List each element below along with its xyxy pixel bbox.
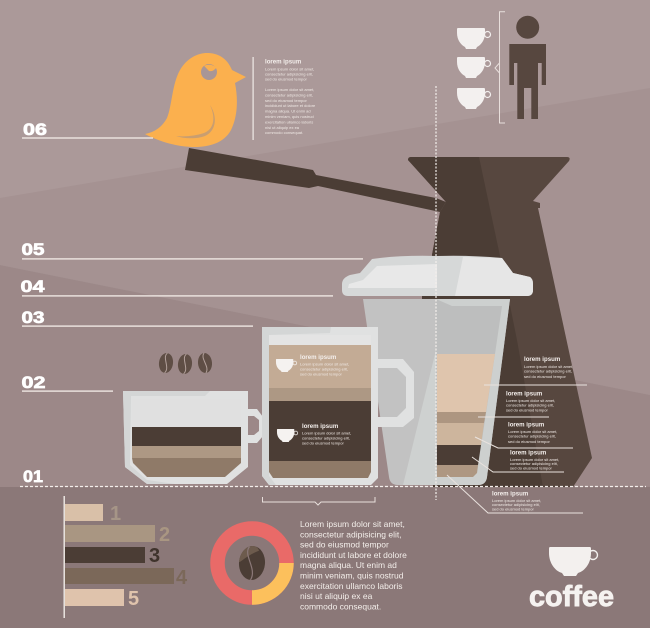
logo cup: [549, 547, 591, 576]
donut chart: [218, 528, 286, 598]
callout 5: consectetur adipisicing elit,: [492, 502, 540, 507]
level labels: 02: [22, 373, 46, 392]
callout 4: [472, 450, 564, 472]
pot shadow side: [408, 157, 543, 487]
mug text lower: [277, 423, 351, 446]
cup lid: [342, 256, 533, 299]
callout 4: sed do eiusmod tempor: [510, 466, 552, 470]
mug text lower: lorem ipsum: [302, 423, 339, 430]
bird wing: [176, 105, 215, 138]
callout 3: sed do eiusmod tempor: [508, 439, 550, 444]
tall mug shell: [262, 327, 378, 485]
bird caption: sed do eiusmod tempor: [265, 76, 307, 82]
coffee pot: [185, 148, 592, 487]
paragraph: incididunt ut labore et dolore: [300, 550, 407, 560]
under mug brace: [262, 497, 375, 505]
callout 3: consectetur adipisicing elit,: [508, 434, 556, 438]
logo text: coffee: [529, 581, 614, 613]
dotted vertical line: [435, 86, 437, 500]
bird caption: [252, 57, 316, 140]
small cup shell: [123, 391, 248, 484]
callout 2: lorem ipsum: [506, 390, 543, 398]
small cup handle: [247, 409, 263, 443]
tall mug layers: [269, 335, 371, 345]
bird caption: consectetur adipisicing elit,: [265, 92, 313, 97]
callout 1: lorem ipsum: [524, 356, 561, 363]
callout 1: consectetur adipisicing elit,: [524, 368, 572, 374]
callout 2: consectetur adipisicing elit,: [506, 402, 554, 408]
mug text upper: [276, 354, 349, 376]
person icon: [509, 16, 546, 119]
bird caption: lorem ipsum: [265, 58, 302, 66]
small cup: [123, 391, 263, 484]
callout 5: Lorem ipsum dolor sit amet,: [492, 498, 541, 503]
bird caption: consectetur adipisicing elit,: [265, 72, 313, 76]
coffee layers: [437, 354, 495, 412]
callouts: [447, 356, 587, 513]
bird caption: exercitation ullamco laboris: [265, 119, 313, 124]
mug text lower: consectetur adipisicing elit,: [302, 436, 350, 440]
mug text lower: sed do eiusmod tempor: [302, 440, 344, 446]
bar chart: 3: [149, 545, 160, 567]
bar chart: 5: [128, 588, 139, 610]
mug text upper: sed do eiusmod tempor: [300, 372, 342, 376]
bird caption: commodo consequat.: [265, 130, 303, 135]
pot body: [408, 157, 592, 487]
bird caption: minim veniam, quis nostrud: [265, 114, 314, 119]
bar chart: 1: [110, 503, 121, 525]
mug text upper: lorem ipsum: [300, 354, 337, 361]
callout 3: Lorem ipsum dolor sit amet,: [508, 429, 557, 434]
bird caption: magna aliqua. Ut enim ad: [265, 109, 311, 114]
bird eye: [201, 64, 217, 80]
bar chart: [64, 496, 188, 618]
bird: [145, 53, 246, 147]
mug text upper: Lorem ipsum dolor sit amet,: [300, 362, 349, 366]
callout 3: [475, 422, 573, 448]
mug text lower: Lorem ipsum dolor sit amet,: [302, 430, 351, 436]
paragraph: nisi ut aliquip ex ea: [300, 591, 373, 601]
bar chart: 2: [159, 524, 170, 546]
dashed base line: [20, 486, 646, 488]
level labels: 06: [23, 120, 47, 139]
cup glass: [363, 299, 510, 485]
level labels: 01: [23, 467, 43, 486]
callout 1: Lorem ipsum dolor sit amet,: [524, 364, 573, 369]
callout 2: Lorem ipsum dolor sit amet,: [506, 398, 555, 403]
paper cup: [363, 299, 510, 485]
callout 5: sed do eiusmod tempor: [492, 506, 534, 512]
paragraph: Lorem ipsum dolor sit amet,: [300, 519, 405, 529]
paragraph: exercitation ullamco laboris: [300, 581, 403, 591]
bird caption: Lorem ipsum dolor sit amet,: [265, 87, 314, 92]
paragraph: consectetur adipisicing elit,: [300, 529, 402, 539]
center bean: [238, 545, 266, 581]
glass highlight: [403, 350, 436, 485]
level labels: [20, 120, 363, 486]
callout 4: consectetur adipisicing elit,: [510, 461, 558, 466]
coffee logo: [529, 547, 614, 613]
paragraph: commodo consequat.: [300, 601, 381, 611]
paragraph: sed do eiusmod tempor: [300, 540, 389, 550]
level labels: 03: [22, 308, 44, 327]
callout 5: [447, 475, 583, 513]
tall mug handle: [370, 359, 414, 427]
coffee beans: [158, 352, 213, 375]
callout 4: lorem ipsum: [510, 450, 547, 456]
bird caption: incididunt ut labore et dolore: [265, 103, 316, 108]
bar chart: 4: [176, 567, 188, 589]
paragraph: magna aliqua. Ut enim ad: [300, 560, 397, 570]
bird caption: Lorem ipsum dolor sit amet,: [265, 66, 314, 72]
callout 1: [484, 356, 587, 385]
callout 1: sed do eiusmod tempor: [524, 374, 566, 379]
paragraph: minim veniam, quis nostrud: [300, 570, 404, 580]
small cup layers: [132, 399, 241, 427]
paragraph: [300, 519, 407, 611]
bird caption: sed do eiusmod tempor: [265, 98, 307, 103]
bird caption: nisi ut aliquip ex ea: [265, 125, 300, 130]
mug text upper: consectetur adipisicing elit,: [300, 366, 348, 372]
bracket: [495, 12, 505, 123]
callout 5: lorem ipsum: [492, 490, 529, 498]
callout 3: lorem ipsum: [508, 422, 545, 428]
level labels: 05: [22, 240, 44, 259]
callout 4: Lorem ipsum dolor sit amet,: [510, 457, 559, 462]
callout 2: [478, 390, 555, 417]
tall mug: [262, 327, 414, 485]
callout 2: sed do eiusmod tempor: [506, 408, 548, 412]
level labels: 04: [20, 277, 45, 296]
three cups icons: [457, 28, 490, 109]
pot handle: [185, 148, 446, 212]
